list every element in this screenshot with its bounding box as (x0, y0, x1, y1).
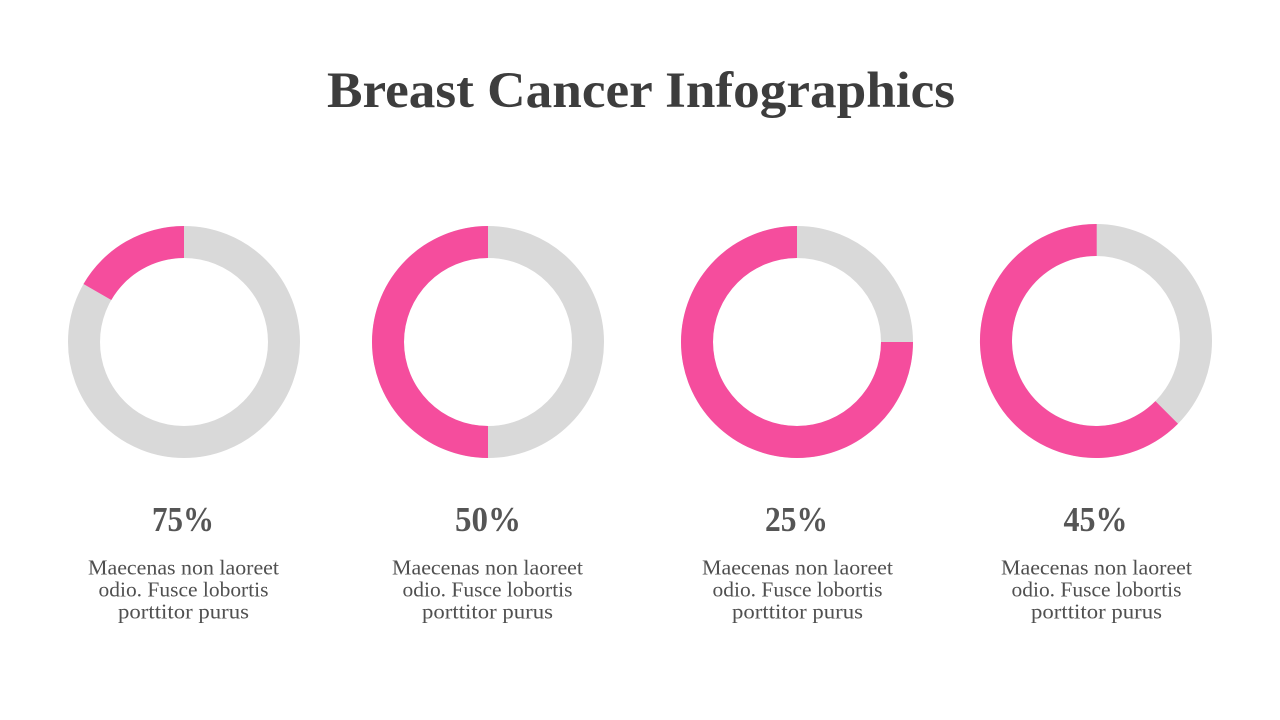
donut chart: 25% (681, 226, 913, 458)
donut chart: 50% (372, 226, 588, 458)
description: Maecenas non laoreet (88, 556, 279, 580)
percentage: 45%: 45% (1064, 500, 1128, 539)
description (702, 556, 893, 624)
panel: 75% (84, 226, 284, 624)
panel: 45% (980, 224, 1212, 623)
description: Maecenas non laoreet (1001, 556, 1192, 580)
description (1001, 556, 1192, 624)
description: odio. Fusce lobortis (402, 578, 572, 602)
panel: 25% (681, 226, 913, 624)
percentage: 75%: 75% (152, 500, 214, 539)
description: odio. Fusce lobortis (712, 578, 882, 602)
description: porttitor purus (118, 600, 249, 624)
description: odio. Fusce lobortis (1012, 578, 1182, 602)
donut chart: 45% (980, 224, 1212, 458)
description: Maecenas non laoreet (702, 556, 893, 580)
description: porttitor purus (422, 600, 553, 624)
description: porttitor purus (732, 600, 863, 624)
description: porttitor purus (1031, 600, 1162, 624)
donut chart: 75% (84, 226, 284, 442)
description: odio. Fusce lobortis (98, 578, 268, 602)
panel: 50% (372, 226, 588, 624)
description (392, 556, 583, 624)
title: Breast Cancer Infographics (327, 63, 955, 119)
percentage: 25%: 25% (765, 500, 828, 539)
percentage: 50%: 50% (455, 500, 521, 539)
description: Maecenas non laoreet (392, 556, 583, 580)
description (88, 556, 279, 624)
